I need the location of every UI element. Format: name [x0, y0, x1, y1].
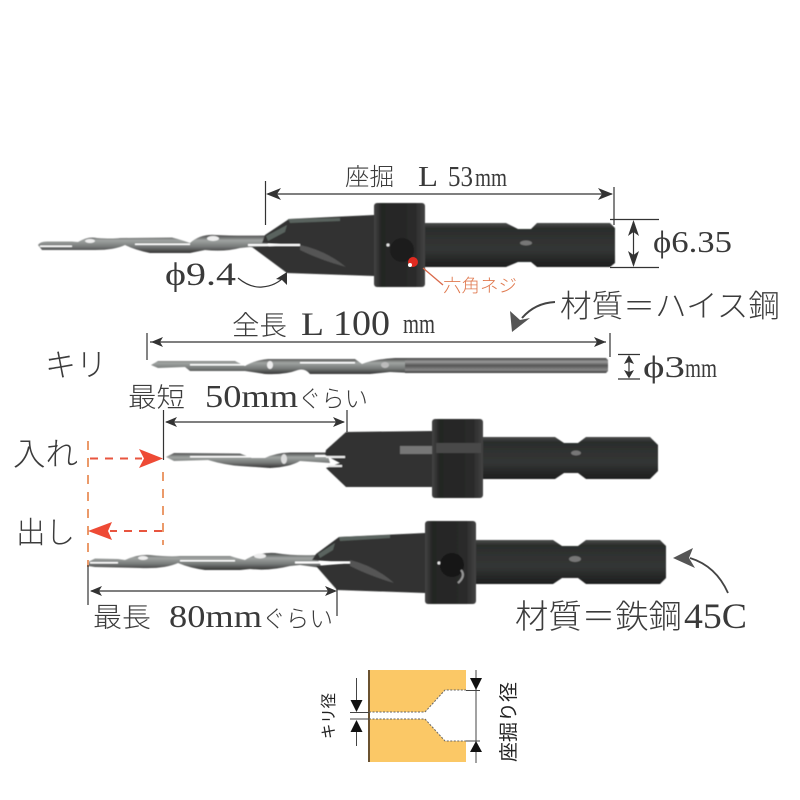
hex shank	[483, 437, 658, 479]
counterbore diameter marker	[466, 670, 480, 763]
workpiece	[369, 670, 466, 762]
dimension: 最短 50mmぐらい	[128, 378, 368, 460]
drill: longest setting	[88, 521, 666, 604]
label: 座掘り径: 座掘り径	[498, 682, 520, 762]
countersink cone	[325, 431, 432, 487]
dimension: φ3mm: mm	[685, 353, 717, 383]
dimension: 最長 80mmぐらい: 80mm	[169, 598, 262, 634]
dimension: φ3mm: ϕ3	[643, 349, 685, 384]
dimension: 全長 L 100 mm: mm	[403, 308, 435, 340]
dimension: 全長 L 100 mm	[147, 303, 610, 360]
dimension: φ3mm	[618, 349, 717, 384]
dimension: 最短 50mmぐらい: ぐらい	[298, 386, 368, 413]
dimension: 最長 80mmぐらい	[88, 565, 337, 634]
twist bit	[38, 235, 270, 253]
callout: φ9.4: ϕ9.4	[165, 257, 236, 293]
label: 出し: 出し	[16, 517, 75, 550]
callout: 六角ネジ: 六角ネジ	[443, 276, 517, 296]
label: キリ: キリ	[45, 347, 107, 383]
dimension: 全長 L 100 mm: 全長	[232, 311, 287, 341]
callout: φ9.4	[165, 257, 287, 293]
dimension: φ6.35	[610, 220, 732, 268]
label: 材質=ハイス鋼 with arrow: 材質＝ハイス鋼	[560, 289, 780, 324]
countersink cone	[252, 215, 374, 276]
drill: top countersink bit	[38, 203, 615, 287]
hex shank	[476, 540, 666, 584]
callout: 六角ネジ	[408, 257, 517, 296]
label: 入れ: 入れ	[13, 436, 78, 472]
countersink cone	[312, 533, 425, 593]
collar	[425, 521, 476, 604]
arrow: red dashed insert and extract path	[88, 441, 163, 567]
label: 材質=鉄鋼45C with arrow: 材質＝鉄鋼	[515, 598, 682, 635]
drill: shortest setting	[166, 419, 658, 498]
dimension: 全長 L 100 mm: 100	[333, 303, 390, 343]
dimension: 座掘 L 53mm: mm	[475, 163, 507, 192]
dimension: 最長 80mmぐらい: 最長	[93, 603, 151, 633]
dimension: 最短 50mmぐらい: 最短	[128, 383, 185, 413]
collar	[432, 419, 483, 498]
dimension: 最長 80mmぐらい: ぐらい	[262, 606, 333, 633]
label: 材質=鉄鋼45C with arrow	[515, 548, 747, 636]
hex shank	[425, 223, 615, 267]
label: 材質=ハイス鋼 with arrow	[510, 289, 780, 332]
dimension: φ6.35: ϕ6.35	[653, 224, 732, 259]
label: キリ径: キリ径	[320, 693, 338, 739]
diagram: counterbore cross-section	[320, 670, 520, 763]
dimension: 座掘 L 53mm	[266, 161, 614, 225]
drill: kiri twist bit	[151, 358, 608, 374]
collar	[374, 203, 425, 287]
dimension: 全長 L 100 mm: L	[301, 307, 324, 343]
dimension: 座掘 L 53mm: 53	[448, 162, 473, 193]
drill diameter marker	[350, 678, 369, 746]
kiri shank	[405, 358, 608, 373]
dimension: 座掘 L 53mm: L	[418, 161, 438, 193]
label: 材質=鉄鋼45C with arrow: 45C	[684, 596, 747, 636]
dimension: 座掘 L 53mm: 座掘	[345, 164, 394, 191]
dimension: 最短 50mmぐらい: 50mm	[205, 378, 298, 414]
